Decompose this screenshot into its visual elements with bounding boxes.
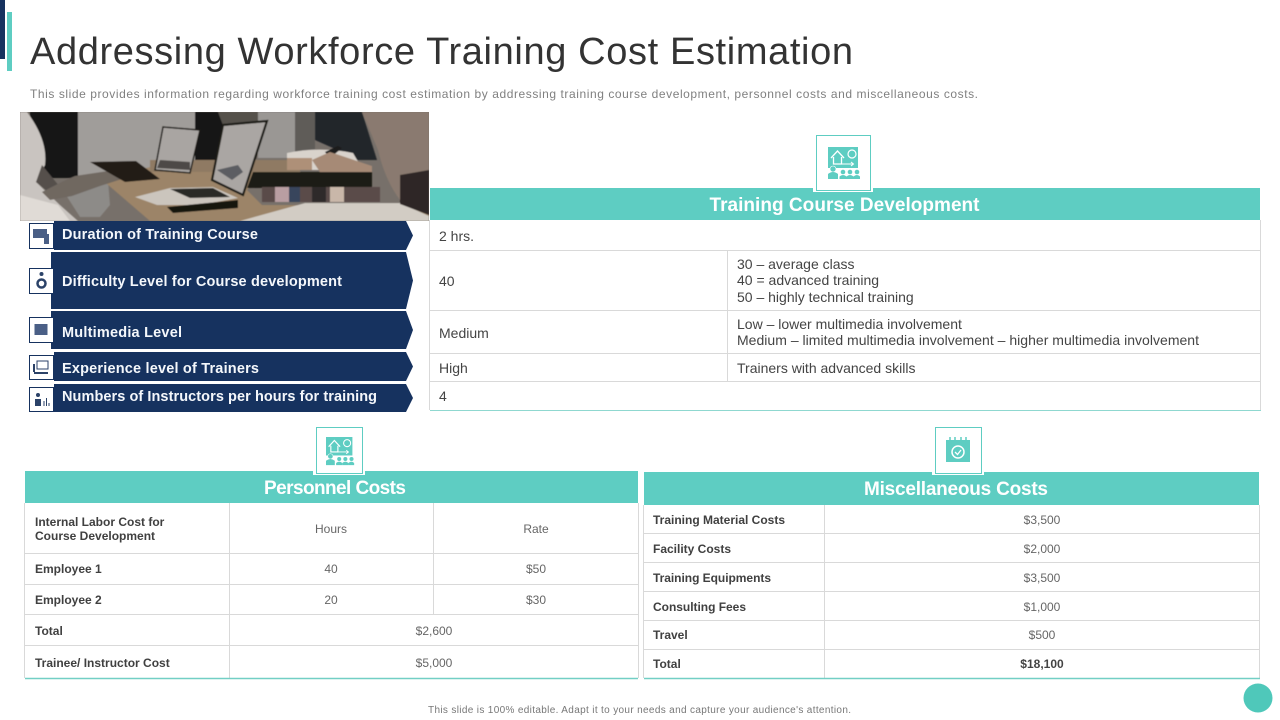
heading: miscellaneous costs: [644, 472, 1259, 505]
table: miscellaneous costs: $3,500: [1024, 513, 1061, 527]
subtitle: This slide provides information regarding workforce training cost estimation by addressing training course development, personnel costs and miscellaneous costs.: [30, 87, 978, 101]
icon: calendar check: [932, 425, 984, 475]
table: miscellaneous costs: Training Material Costs: [653, 513, 785, 527]
row arrow: Difficulty Level: [30, 252, 413, 309]
table: personnel costs: $50: [526, 562, 546, 576]
table: personnel costs: Employee 2: [35, 593, 102, 607]
table: training details: 50 – highly technical training: [737, 289, 914, 305]
table: training details: Medium – limited multimedia involvement – higher multimedia involvement: [737, 332, 1199, 348]
table: personnel costs: $2,600: [416, 624, 453, 638]
table: personnel costs: $5,000: [416, 656, 453, 670]
table: personnel costs: Employee 1: [35, 562, 102, 576]
row arrow: Numbers of Instructors: Numbers of Instructors per hours for training: [62, 389, 377, 405]
heading: miscellaneous costs: Miscellaneous Costs: [864, 479, 1048, 500]
table: miscellaneous costs: Consulting Fees: [653, 600, 746, 614]
table: miscellaneous costs: $18,100: [1020, 657, 1064, 671]
icon: duration: [30, 224, 54, 248]
table: miscellaneous costs: $500: [1029, 628, 1056, 642]
table: miscellaneous costs: $1,000: [1024, 600, 1061, 614]
table: miscellaneous costs: [644, 505, 1260, 678]
title: Addressing Workforce Training Cost Estimation: [30, 31, 853, 73]
table: personnel costs: Rate: [523, 522, 549, 536]
table: personnel costs: Total: [35, 624, 63, 638]
icon: training board: [813, 133, 873, 192]
icon: multimedia: [30, 318, 54, 342]
table: training details: [430, 220, 1261, 410]
table: training details: 30 – average class: [737, 256, 855, 272]
icon: personnel board: [313, 425, 365, 475]
table: personnel costs: Trainee/ Instructor Cost: [35, 656, 170, 670]
row arrow: Experience level: Experience level of Trainers: [62, 361, 259, 377]
icon: difficulty gear: [30, 268, 54, 294]
row arrow: Duration of Training Course: Duration of Training Course: [62, 227, 258, 243]
table: personnel costs: Course Development: [35, 529, 155, 543]
photo: team working on laptops: [20, 112, 429, 221]
icon: trainers: [30, 356, 54, 380]
row arrow: Duration of Training Course: [30, 221, 413, 250]
table: training details: 4: [439, 388, 447, 404]
panel: training course development: [430, 133, 1261, 410]
row arrow: Multimedia Level: [30, 311, 413, 349]
table: personnel costs: $30: [526, 593, 546, 607]
row arrow: Numbers of Instructors: [30, 384, 413, 412]
table: training details: Medium: [439, 325, 489, 341]
accent bars: [0, 0, 12, 71]
table: training details: 40: [439, 273, 455, 289]
decorative circle button: [1244, 684, 1272, 712]
table: miscellaneous costs: $2,000: [1024, 542, 1061, 556]
row arrow: Difficulty Level: Difficulty Level for Course development: [62, 274, 342, 290]
table: training details: High: [439, 360, 468, 376]
heading: training course development: [430, 188, 1260, 220]
table: miscellaneous costs: Training Equipments: [653, 571, 771, 585]
table: miscellaneous costs: Travel: [653, 628, 688, 642]
row arrow: Multimedia Level: Multimedia Level: [62, 325, 182, 341]
table: miscellaneous costs: Total: [653, 657, 681, 671]
heading: training course development: Training Course Development: [710, 195, 980, 216]
heading: personnel costs: [25, 471, 638, 503]
table: training details: Trainers with advanced skills: [737, 360, 915, 376]
footer note: This slide is 100% editable. Adapt it to your needs and capture your audience's attention.: [428, 705, 851, 716]
table: personnel costs: 40: [324, 562, 338, 576]
table: training details: Low – lower multimedia involvement: [737, 316, 962, 332]
icon: instructors: [30, 388, 54, 412]
table: miscellaneous costs: Facility Costs: [653, 542, 731, 556]
panel: miscellaneous costs: [644, 425, 1260, 678]
panel: personnel costs: [24, 425, 638, 678]
table: personnel costs: Hours: [315, 522, 347, 536]
table: training details: 2 hrs.: [439, 228, 474, 244]
heading: personnel costs: Personnel Costs: [264, 478, 406, 499]
table: miscellaneous costs: $3,500: [1024, 571, 1061, 585]
row arrow: Experience level: [30, 352, 413, 381]
table: personnel costs: Internal Labor Cost for: [35, 515, 165, 529]
table: personnel costs: 20: [324, 593, 338, 607]
table: personnel costs: [24, 503, 638, 678]
table: training details: 40 = advanced training: [737, 272, 879, 288]
